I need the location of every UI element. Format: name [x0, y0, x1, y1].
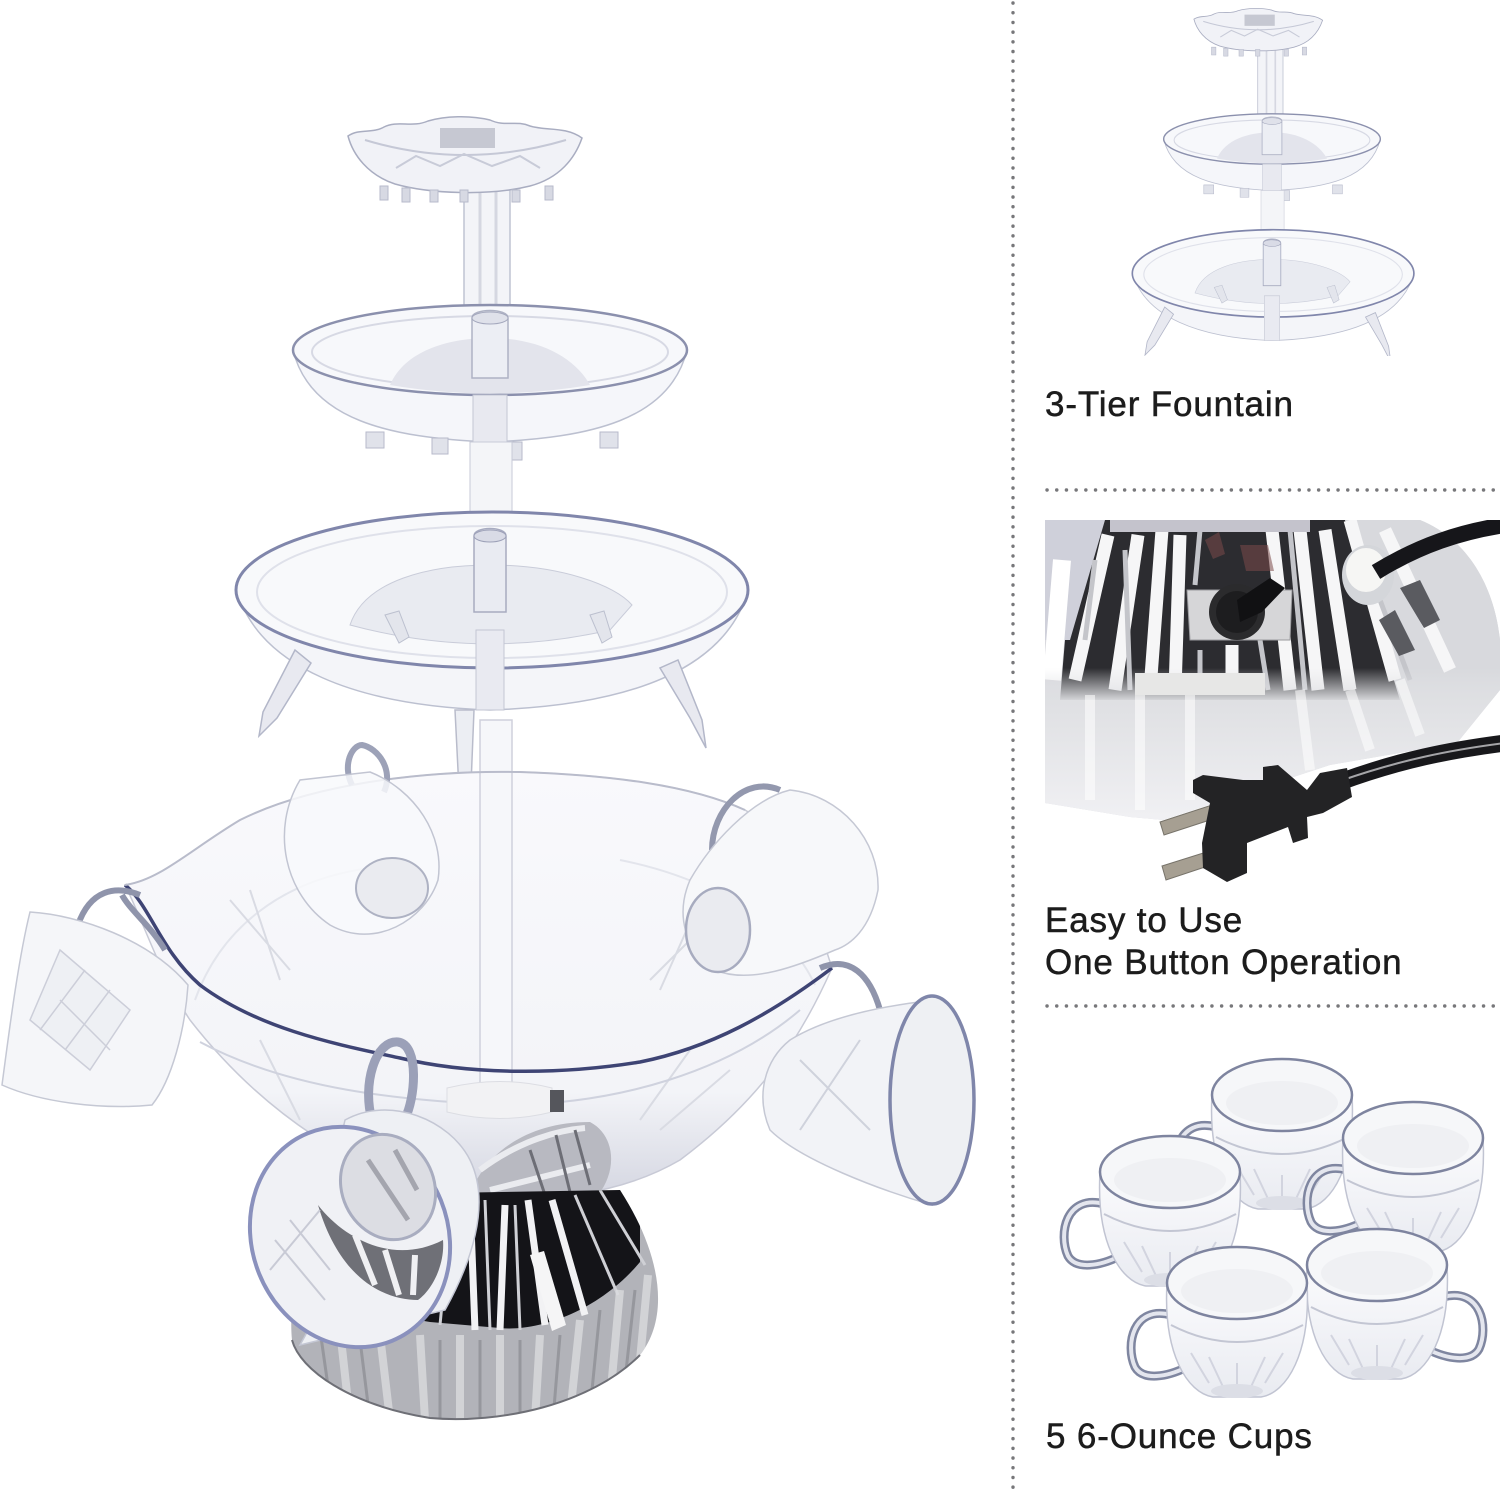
cup: back centre [284, 745, 439, 934]
bowl rim [125, 885, 832, 1071]
panel: 3-tier fountain [1045, 8, 1414, 424]
cup: right back [683, 786, 878, 975]
heading: 3-Tier Fountain: 3-Tier Fountain [1045, 385, 1294, 424]
text: easy to use [1045, 901, 1402, 982]
fountain tiers [236, 117, 748, 748]
base close-up photo with toggle and plug [1040, 520, 1500, 882]
pump housing [447, 1082, 552, 1118]
centre spout under lowest tier [455, 710, 474, 810]
panel: five cups [1046, 1059, 1483, 1456]
cup 4 [1131, 1247, 1307, 1398]
cup: left hanging [2, 890, 188, 1106]
plug prongs [1159, 805, 1210, 881]
horizontal dotted divider [1047, 1004, 1499, 1008]
punch bowl [125, 720, 832, 1204]
vertical dotted divider [1011, 3, 1015, 1495]
cup: right lower [763, 964, 974, 1205]
cup 5 [1307, 1229, 1483, 1380]
cup 1 [1064, 1136, 1240, 1287]
reflections at bowl foot [468, 1122, 611, 1204]
power cord lower [1340, 743, 1500, 782]
text: easy to use: One Button Operation [1045, 943, 1402, 982]
plug body [1193, 765, 1352, 882]
main product: lighted punch fountain [2, 117, 974, 1420]
horizontal dotted divider [1047, 488, 1499, 492]
panel: easy to use [1040, 520, 1500, 982]
text: easy to use: Easy to Use [1045, 901, 1243, 940]
toggle switch [1135, 578, 1292, 695]
power cord upper [1376, 525, 1500, 572]
fountain thumbnail [1132, 8, 1414, 362]
fountain base [291, 1190, 658, 1420]
caption: 5 6-ounce cups: 5 6-Ounce Cups [1046, 1417, 1313, 1456]
cup 3 [1307, 1102, 1483, 1253]
cup 2 [1176, 1059, 1352, 1210]
cord grommet [1342, 546, 1385, 605]
cup: front with handle [217, 1042, 483, 1378]
